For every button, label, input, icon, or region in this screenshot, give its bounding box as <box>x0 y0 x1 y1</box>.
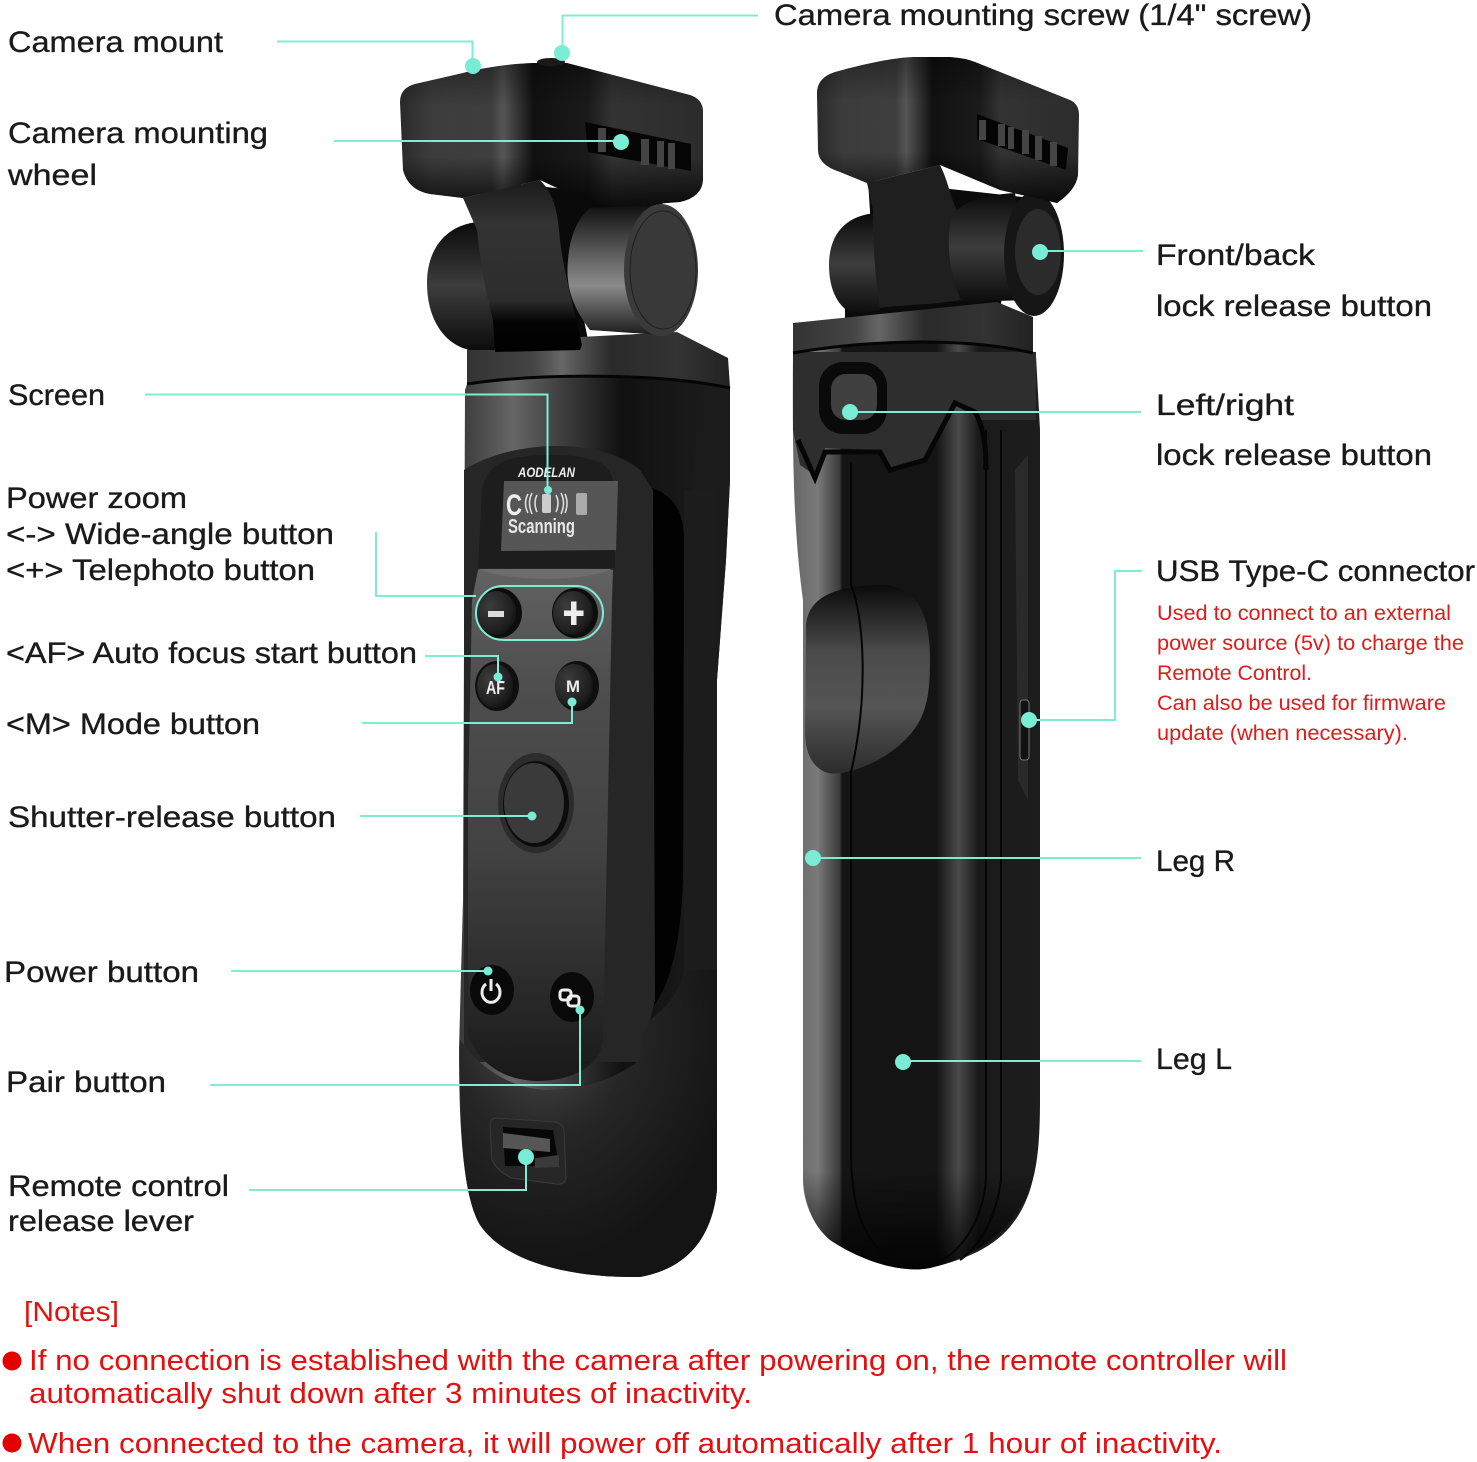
remote: zoom plus button <box>552 588 598 638</box>
remote: M button <box>555 661 599 711</box>
remote: AF button: AF <box>486 678 505 698</box>
leader: leg R <box>805 850 1141 866</box>
left device: left cylinder <box>427 222 500 350</box>
note text: first note: If no connection is established with the camera after powering on, the remote controller will <box>29 1345 1287 1377</box>
leader: USB connector <box>1021 571 1142 728</box>
text block: USB note: Can also be used for firmware <box>1157 692 1446 715</box>
right device: USB port <box>1020 700 1029 760</box>
leader: front/back lock <box>1032 244 1143 260</box>
notes heading: [Notes] <box>24 1296 119 1327</box>
label: power zoom <box>6 482 334 587</box>
right device: main body <box>793 339 1040 1269</box>
bullet: first note <box>2 1352 22 1370</box>
right device: camera head <box>817 57 1079 203</box>
label: left/right lock release: lock release button <box>1156 439 1432 472</box>
label: left/right lock release: Left/right <box>1156 389 1295 422</box>
labels: top and right column <box>774 0 1475 1076</box>
leader: power zoom <box>376 532 603 640</box>
remote: screen: Scanning <box>508 516 575 538</box>
remote: button panel <box>468 570 613 1081</box>
left device: camera head <box>400 63 703 208</box>
right device: neck <box>867 165 962 308</box>
leader: shutter button <box>360 812 536 820</box>
device: side view <box>793 57 1079 1269</box>
right device: dark joint filler <box>845 180 1050 325</box>
label: leg R: Leg R <box>1156 845 1235 878</box>
text block: USB note: power source (5v) to charge the <box>1157 632 1464 655</box>
label: remote control release lever: release lever <box>8 1205 194 1238</box>
left device: dark joint filler <box>480 180 670 350</box>
device: front view with remote control <box>400 58 730 1277</box>
label: remote control release lever: Remote control <box>8 1170 229 1203</box>
label: camera mounting wheel <box>7 117 268 192</box>
remote: release lever <box>490 1118 566 1184</box>
bullet: second note <box>2 1434 22 1452</box>
left device: collar shadow line <box>467 376 730 388</box>
right device: latch edge <box>798 403 986 478</box>
right device: mounting wheel <box>977 114 1068 170</box>
leader: pair button <box>210 1006 584 1085</box>
text block: USB note: Remote Control. <box>1157 662 1312 685</box>
leader: AF button <box>425 656 502 682</box>
leader: screen <box>145 394 552 494</box>
text block: USB note: update (when necessary). <box>1157 722 1408 745</box>
label: USB Type-C connector: USB Type-C connector <box>1156 555 1475 588</box>
remote: lighter strip under screen <box>478 569 612 579</box>
label: camera mounting wheel: wheel <box>7 159 97 192</box>
label: pair button: Pair button <box>6 1066 166 1099</box>
right device: right cylinder <box>949 193 1030 302</box>
right device: collar shadow line <box>793 342 1033 353</box>
callouts: leader lines and dots <box>145 16 1143 1190</box>
note text: second note: When connected to the camera, it will power off automatically after 1 hour of inactivity. <box>28 1428 1222 1460</box>
text block: USB note <box>1157 602 1464 745</box>
leader: camera mount <box>277 42 481 74</box>
remote: pair button <box>550 972 594 1022</box>
remote: logo: AODELAN <box>517 464 576 480</box>
remote: AF button <box>475 661 519 711</box>
label: leg L: Leg L <box>1156 1043 1232 1076</box>
right device: latch trim <box>793 352 1036 476</box>
remote: zoom minus button <box>476 588 522 638</box>
label: power zoom: <+> Telephoto button <box>6 554 315 587</box>
screen: battery icon <box>576 493 587 515</box>
remote: shutter button <box>498 753 574 853</box>
label: M button: <M> Mode button <box>6 708 260 741</box>
label: power button: Power button <box>4 956 199 989</box>
right device: head shading <box>817 57 1079 203</box>
left device: mounting screw nub <box>537 58 565 66</box>
left device: remote bottom cover <box>460 970 717 1277</box>
right device: seam lines <box>851 430 1001 1262</box>
label: power zoom: Power zoom <box>6 482 187 515</box>
leader: leg L <box>895 1054 1141 1070</box>
remote: screen <box>501 481 618 551</box>
labels: left column <box>4 26 417 1238</box>
left device: main body <box>459 374 730 1277</box>
note text: first note: automatically shut down after 3 minutes of inactivity. <box>29 1378 752 1410</box>
label: left/right lock release <box>1156 389 1432 472</box>
label: screen: Screen <box>8 379 105 412</box>
label: shutter button: Shutter-release button <box>8 801 336 834</box>
right device: left cylinder <box>829 213 880 315</box>
right device: side strip <box>1015 455 1028 800</box>
label: front/back lock release <box>1156 239 1432 323</box>
remote: M button: M <box>566 677 580 696</box>
leader: camera mounting screw <box>554 16 758 61</box>
label: front/back lock release: lock release button <box>1156 290 1432 323</box>
left device: collar <box>467 332 730 387</box>
label: power zoom: <-> Wide-angle button <box>6 518 334 551</box>
left device: black grip channel <box>640 485 684 1022</box>
remote: power button <box>470 965 514 1015</box>
right device: bottom shading <box>803 1170 1035 1269</box>
left device: head shading <box>400 63 703 208</box>
right device: front/back lock disc <box>1004 192 1064 316</box>
left device: right cylinder <box>567 205 662 335</box>
label: AF button: <AF> Auto focus start button <box>6 637 417 670</box>
right device: collar <box>793 302 1033 352</box>
leader: power button <box>231 966 492 976</box>
right device: grip recess <box>805 585 930 773</box>
text block: USB note: Used to connect to an external <box>1157 602 1451 625</box>
left device: mounting wheel slot <box>585 122 691 171</box>
screen: wireless icon <box>526 493 567 514</box>
label: remote control release lever <box>8 1170 229 1238</box>
leader: release lever <box>249 1149 534 1190</box>
note text: first note <box>29 1345 1287 1410</box>
right device: left/right lock button <box>819 362 887 434</box>
label: camera mounting wheel: Camera mounting <box>8 117 268 150</box>
leader: camera mounting wheel <box>334 134 629 150</box>
leader: M button <box>362 698 576 723</box>
label: camera mount: Camera mount <box>8 26 224 59</box>
left device: lock disc <box>624 204 698 336</box>
notes section <box>2 1296 1287 1460</box>
left device: neck <box>463 180 582 352</box>
remote: top dark section <box>478 455 615 568</box>
left device: remote carrier <box>464 446 655 1062</box>
left device: rear rail <box>690 378 730 1100</box>
leader: left/right lock <box>842 404 1141 420</box>
label: front/back lock release: Front/back <box>1156 239 1316 272</box>
remote: screen: C <box>506 489 522 522</box>
left device: outer grip strip <box>684 490 717 1110</box>
